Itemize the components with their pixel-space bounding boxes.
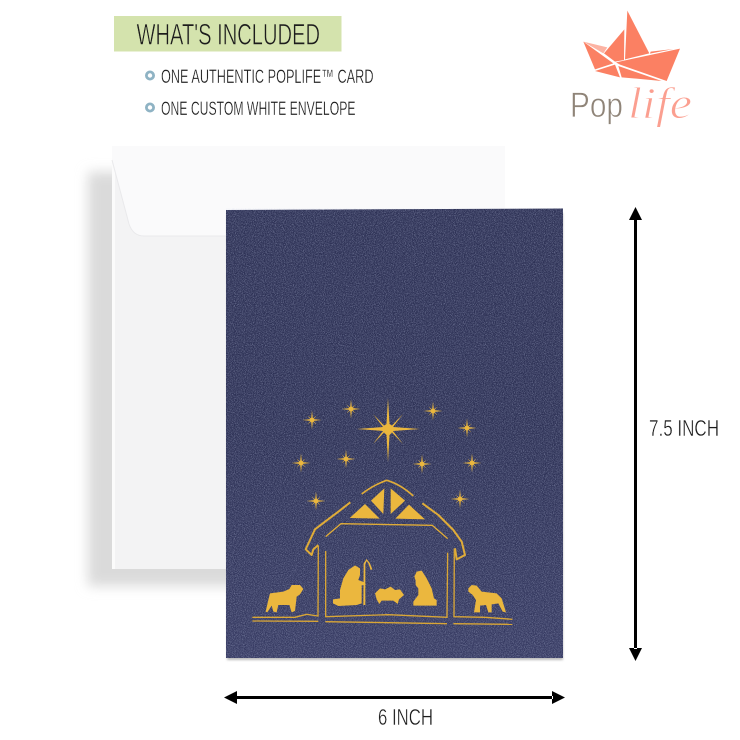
nativity artwork [252,398,512,624]
figure: baby in manger [375,587,404,604]
card: nativity pop-up card [226,208,563,660]
envelope [88,146,505,586]
icon: paper boat [583,11,680,81]
envelope body [112,146,505,569]
envelope shadow [88,172,288,586]
envelope flap [112,146,505,236]
figure: mary [413,571,437,606]
heading: what's included: WHAT'S INCLUDED [136,18,320,52]
stable posts and ground [252,546,512,624]
dimension arrow: width [224,691,565,704]
item: envelope [146,98,356,120]
item: card: ONE AUTHENTIC POPLIFE™ CARD [161,66,374,88]
icon: star of bethlehem [357,398,420,462]
logo: poplife [570,11,692,128]
item: envelope: ONE CUSTOM WHITE ENVELOPE [161,98,356,120]
sheep left [266,585,303,612]
heading: what's included [114,16,342,52]
stars [292,398,482,510]
dimension label: 6 inch: 6 INCH [378,704,433,730]
item: card [146,66,374,88]
wordmark: life: life [628,79,692,128]
sheep right [468,585,506,612]
stable roof [306,480,465,559]
dimension arrow: height [629,207,642,661]
figures [333,559,437,606]
wordmark: pop: Pop [570,86,623,125]
figure: joseph with staff [333,565,366,606]
list of included items [146,66,374,120]
